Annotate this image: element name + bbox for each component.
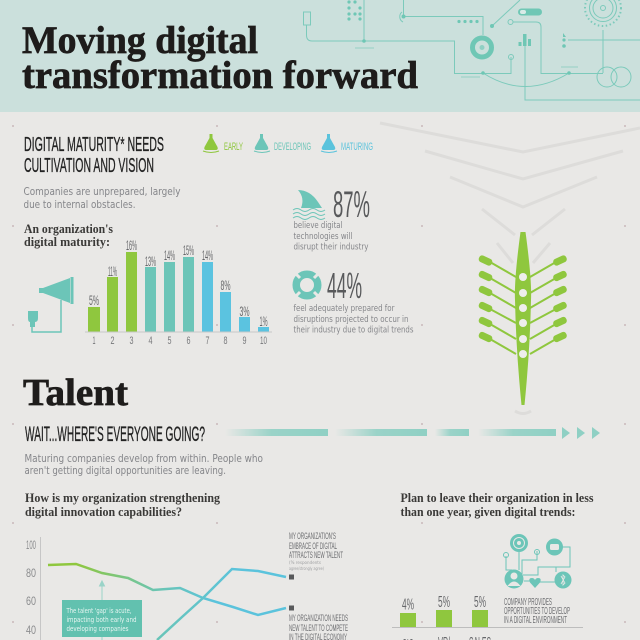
text: NEW TALENT TO COMPETE <box>289 623 348 634</box>
line chart <box>26 537 286 640</box>
progress bar arrow <box>225 427 600 439</box>
line chart: 100 <box>26 538 36 552</box>
heading: Talent: Talent <box>23 372 128 414</box>
callout: impacting both early and <box>66 616 136 624</box>
text: talent intro: aren't getting digital opportunities are leaving. <box>24 465 226 477</box>
legend: developing: DEVELOPING <box>274 141 311 153</box>
bar chart: digital maturity: 14% <box>202 247 213 263</box>
arrow: gap <box>100 581 104 640</box>
text: company provides: COMPANY PROVIDES <box>504 597 552 608</box>
subheading: strengthening: digital innovation capabilities? <box>25 504 182 519</box>
bar chart: digital maturity: 7 <box>206 335 210 347</box>
callout: The talent 'gap' is acute, <box>66 607 132 615</box>
bar chart: digital maturity: 6 <box>186 335 190 347</box>
bar chart: digital maturity: 1 <box>92 335 96 347</box>
icon: dot grid <box>347 0 362 21</box>
icon: connector <box>304 12 310 25</box>
title: transformation forward <box>22 54 418 97</box>
bar chart: digital maturity: 11% <box>108 263 117 279</box>
bar chart: plan to leave <box>392 594 583 640</box>
subheading: strengthening: How is my organization strengthening <box>25 490 220 505</box>
stat: 87%: believe digital <box>294 221 342 231</box>
bar chart: digital maturity <box>85 237 272 347</box>
bar chart: digital maturity: 1% <box>260 313 268 329</box>
text: talent intro <box>24 453 263 477</box>
line label: needs talent <box>289 606 348 640</box>
stat: 44%: 44% <box>327 265 362 306</box>
icon: mini bars <box>518 34 531 46</box>
heading: digital maturity: CULTIVATION AND VISION <box>24 155 154 177</box>
bar chart: plan to leave: 5% <box>438 594 450 611</box>
icon: pill switch <box>518 8 542 16</box>
icon: target ring <box>472 38 492 57</box>
title <box>22 19 418 97</box>
legend: developing <box>254 134 311 153</box>
header band <box>0 0 640 112</box>
bar chart: digital maturity: 15% <box>183 242 194 258</box>
legend: maturing: MATURING <box>341 141 373 153</box>
bar chart: digital maturity: 5% <box>89 292 99 308</box>
stat: 87%: technologies will <box>294 232 352 242</box>
text: IN A DIGITAL ENVIRONMENT <box>504 615 567 626</box>
title: Moving digital <box>22 19 258 62</box>
subheading: plan to leave <box>400 490 594 519</box>
line chart: 40 <box>26 623 36 637</box>
subheading: organization maturity <box>24 222 113 249</box>
stat: 44% <box>293 265 414 336</box>
bar chart: digital maturity: 4 <box>148 335 152 347</box>
stat: 44%: disruptions projected to occur in <box>294 315 408 325</box>
icon: lifebuoy <box>293 271 321 299</box>
bar chart: digital maturity: 3% <box>240 303 250 319</box>
line label: attracts talent: (% respondents <box>289 560 322 566</box>
stat: 87%: disrupt their industry <box>294 242 369 252</box>
bar chart: plan to leave: 4% <box>402 596 414 614</box>
bar chart: digital maturity: 16% <box>126 237 137 253</box>
bar chart: digital maturity: 8% <box>220 277 230 293</box>
heading: digital maturity: DIGITAL MATURITY* NEEDS <box>24 134 164 156</box>
icon: megaphone <box>28 277 74 332</box>
subheading: plan to leave: than one year, given digital trends: <box>400 504 576 519</box>
stat: 44%: feel adequately prepared for <box>294 304 395 314</box>
callout: developing companies <box>66 625 129 633</box>
legend: early <box>203 134 243 153</box>
bar chart: digital maturity: 9 <box>242 335 246 347</box>
icon: connected devices <box>504 534 572 588</box>
legend: early: EARLY <box>224 141 243 153</box>
subheading: plan to leave: Plan to leave their organization in less <box>400 490 594 505</box>
bar chart: digital maturity: 8 <box>224 335 228 347</box>
circuit decoration <box>304 0 640 100</box>
text: ATTRACTS NEW TALENT <box>289 550 343 561</box>
line chart: 80 <box>26 566 36 580</box>
legend: maturing <box>321 134 373 153</box>
subheading: organization maturity: An organization's <box>24 222 113 236</box>
text: talent intro: Maturing companies develop from within. People who <box>24 453 263 465</box>
bar chart: digital maturity: 10 <box>260 335 267 347</box>
stat: 87% <box>293 184 370 252</box>
line label: attracts talent: agree/strongly agree) <box>289 566 324 572</box>
bar chart: plan to leave: 5% <box>474 594 486 611</box>
icon: shark fin <box>293 190 325 220</box>
bar chart: digital maturity: 2 <box>110 335 114 347</box>
line chart: 60 <box>26 594 36 608</box>
text: WAIT...WHERE'S EVERYONE GOING? <box>25 423 205 446</box>
bar chart: digital maturity: 14% <box>164 247 175 263</box>
text: MY ORGANIZATION NEEDS <box>289 613 348 624</box>
illustration: rowing boat with chevrons <box>380 123 640 414</box>
text: company provides <box>504 597 570 626</box>
text: 87% <box>333 184 370 225</box>
line label: attracts talent <box>289 531 343 580</box>
subheading: strengthening <box>25 490 220 519</box>
registration marks <box>12 125 626 623</box>
stat: 44%: their industry due to digital trends <box>294 326 414 336</box>
text: intro: due to internal obstacles. <box>24 199 136 211</box>
bar chart: digital maturity: 13% <box>145 253 156 269</box>
bar chart: digital maturity: 5 <box>168 335 172 347</box>
text: intro: Companies are unprepared, largely <box>24 186 180 198</box>
line label: attracts talent: EMBRACE OF DIGITAL <box>289 541 337 552</box>
text: intro <box>24 186 180 211</box>
bar chart: digital maturity: 3 <box>130 335 134 347</box>
icon: sprocket <box>593 0 613 18</box>
callout <box>62 600 142 637</box>
line label: attracts talent: MY ORGANIZATION'S <box>289 531 336 542</box>
legend <box>203 134 373 153</box>
heading: digital maturity <box>24 134 164 177</box>
subheading: organization maturity: digital maturity: <box>24 235 110 249</box>
